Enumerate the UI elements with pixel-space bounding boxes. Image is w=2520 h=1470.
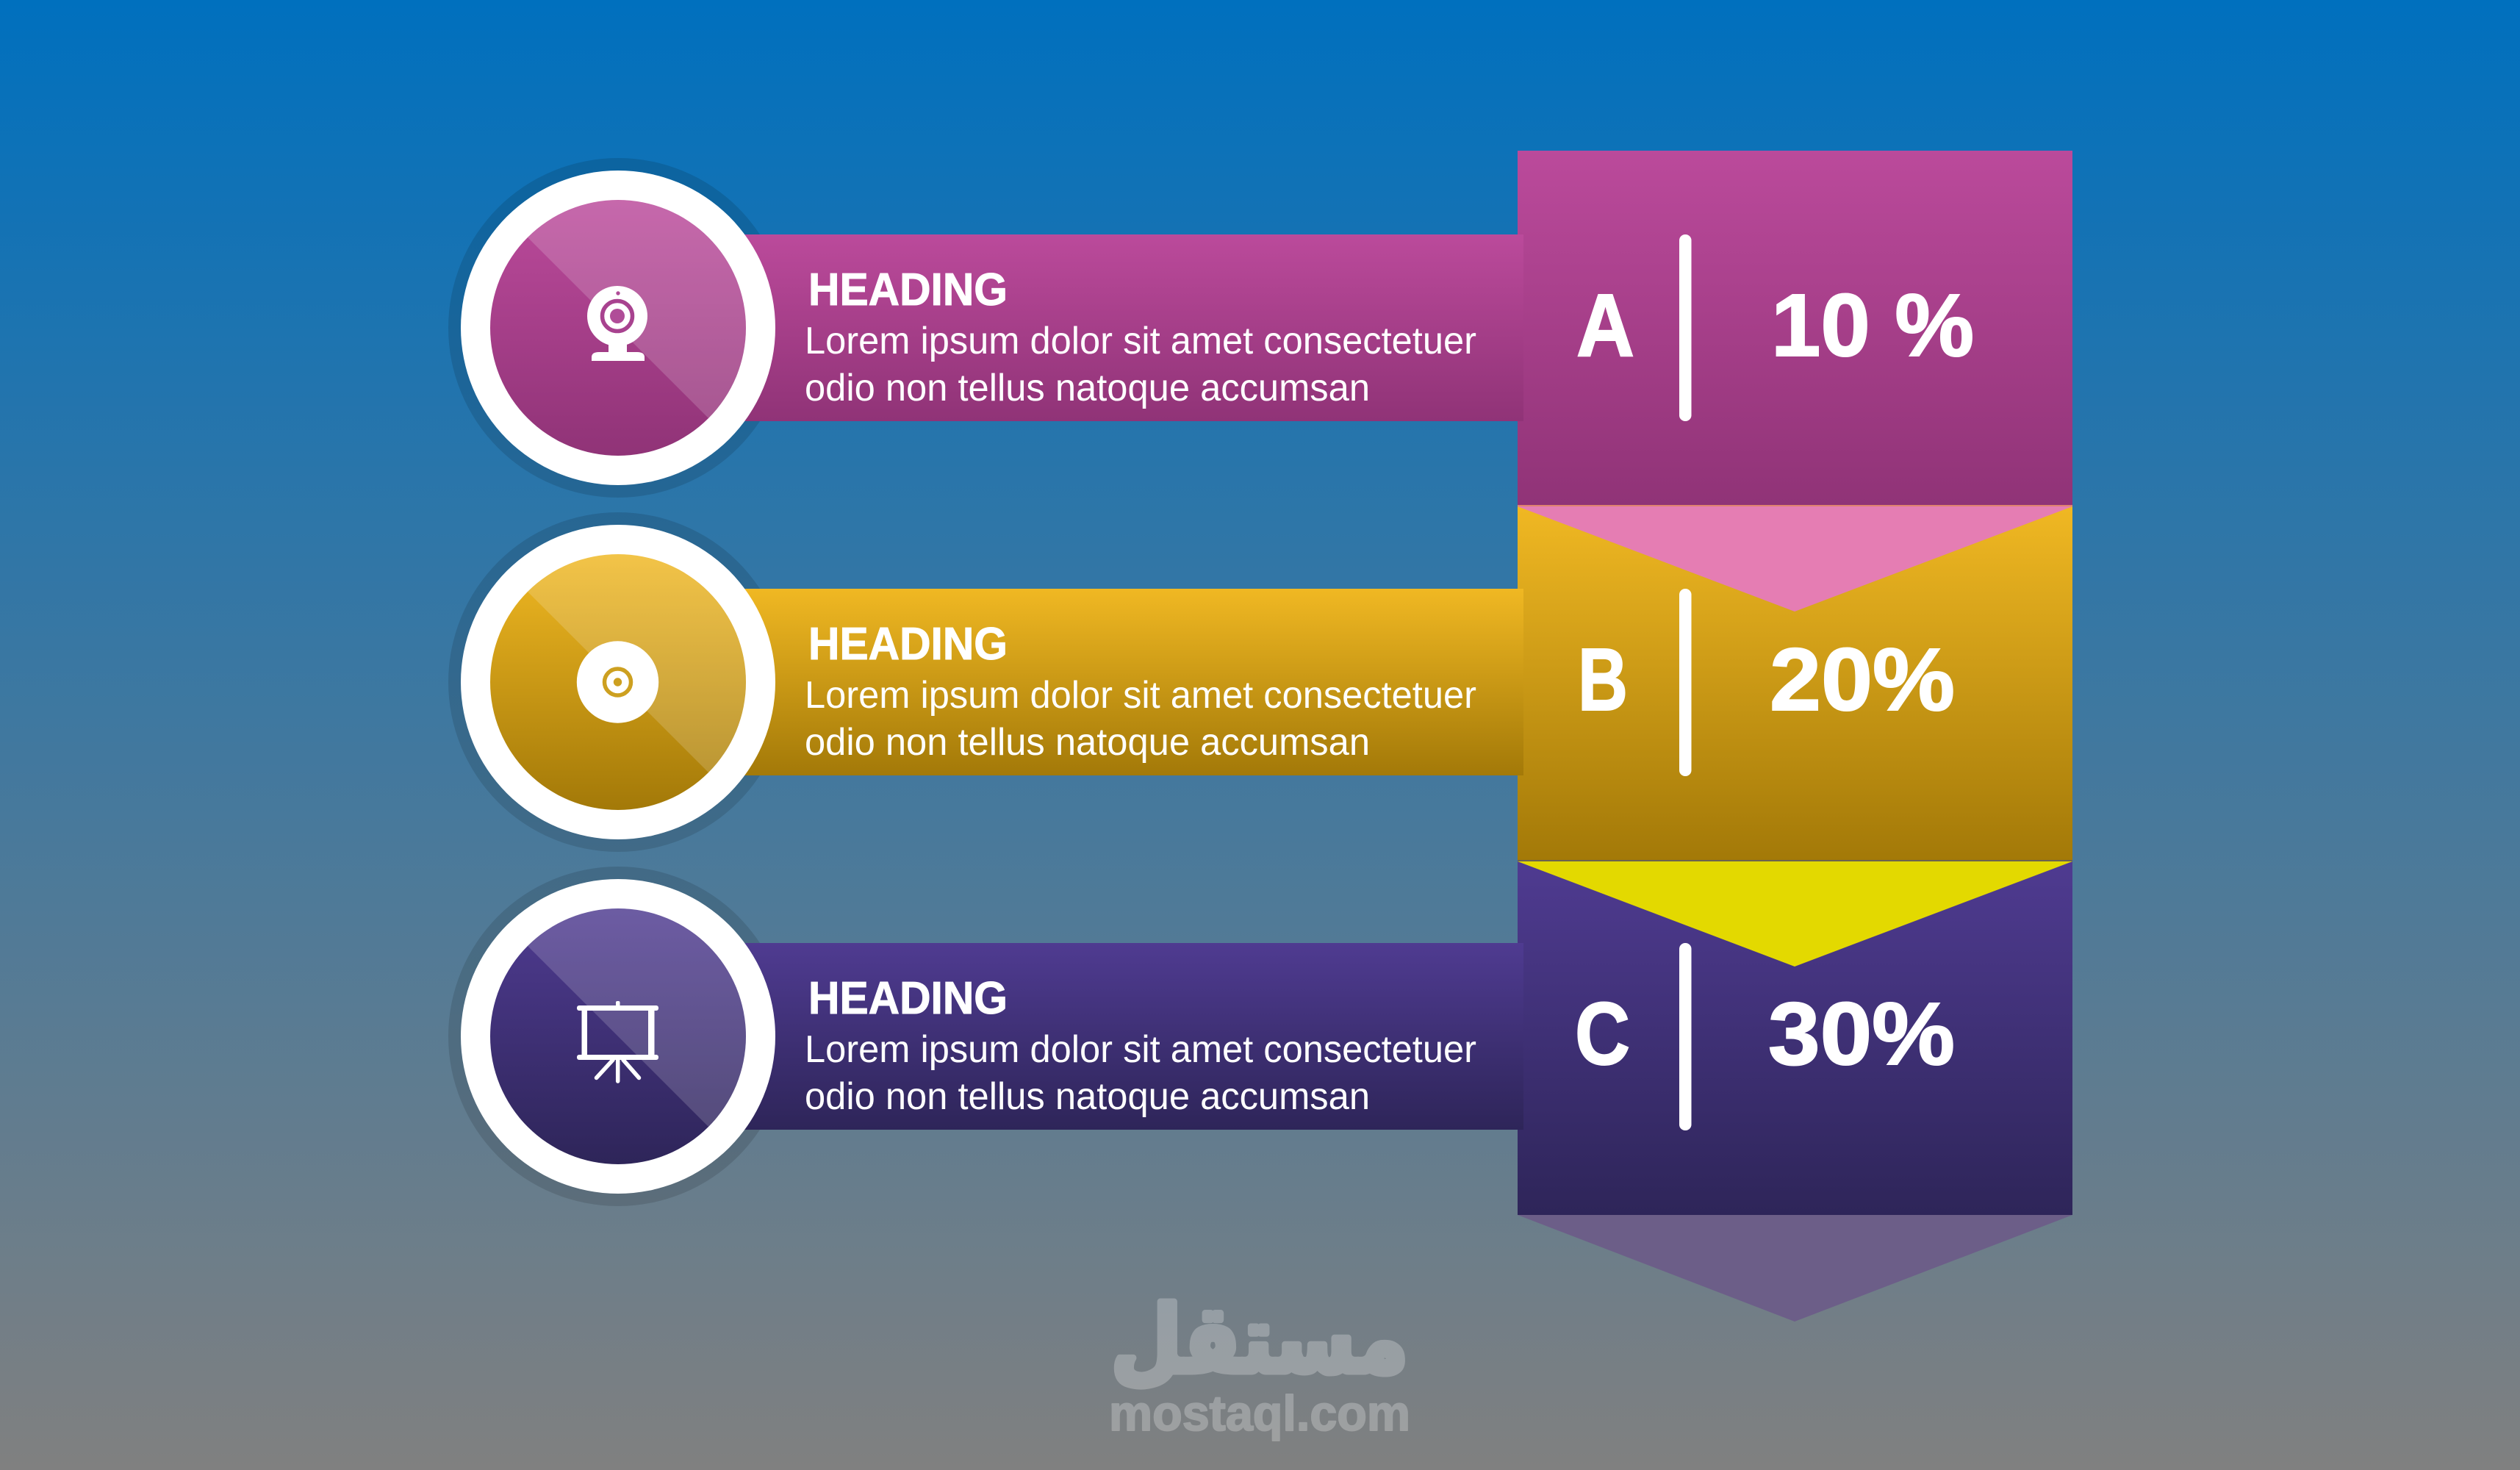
body text B: odio non tellus natoque accumsan [805,721,1370,764]
panel: row A [448,158,1523,498]
letter C: C [1575,983,1630,1083]
panel: row C [448,867,1523,1206]
body text A: odio non tellus natoque accumsan [805,367,1370,409]
icon: disc [577,641,658,723]
watermark [1109,1287,1410,1441]
divider B [1679,589,1692,776]
divider C [1679,943,1692,1130]
divider A [1679,234,1692,421]
icon: webcam [587,286,647,361]
watermark: mostaql.com [1109,1385,1410,1441]
panel: block B [1518,505,2072,861]
heading B: HEADING [808,619,1008,670]
value 10 %: 10 % [1771,275,1974,375]
icon: projector screen [577,1001,658,1081]
panel: block A [1518,151,2072,506]
arrow: pink pointer [1518,506,2072,612]
body text C: odio non tellus natoque accumsan [805,1075,1370,1118]
body text A [805,320,1476,409]
heading A: HEADING [808,265,1008,315]
value 20%: 20% [1770,629,1955,729]
body text C [805,1028,1476,1118]
body text A: Lorem ipsum dolor sit amet consectetuer [805,320,1476,362]
panel: row B [448,512,1523,852]
arrow: bottom translucent pointer [1518,1215,2072,1322]
body text B: Lorem ipsum dolor sit amet consectetuer [805,674,1476,717]
panel: block C [1518,860,2072,1215]
body text C: Lorem ipsum dolor sit amet consectetuer [805,1028,1476,1071]
body text B [805,674,1476,764]
heading C: HEADING [808,973,1008,1024]
letter B: B [1578,629,1628,729]
letter A: A [1576,275,1634,375]
value 30%: 30% [1768,983,1955,1083]
watermark: مستقل [1111,1287,1408,1394]
arrow: yellow pointer [1518,861,2072,967]
